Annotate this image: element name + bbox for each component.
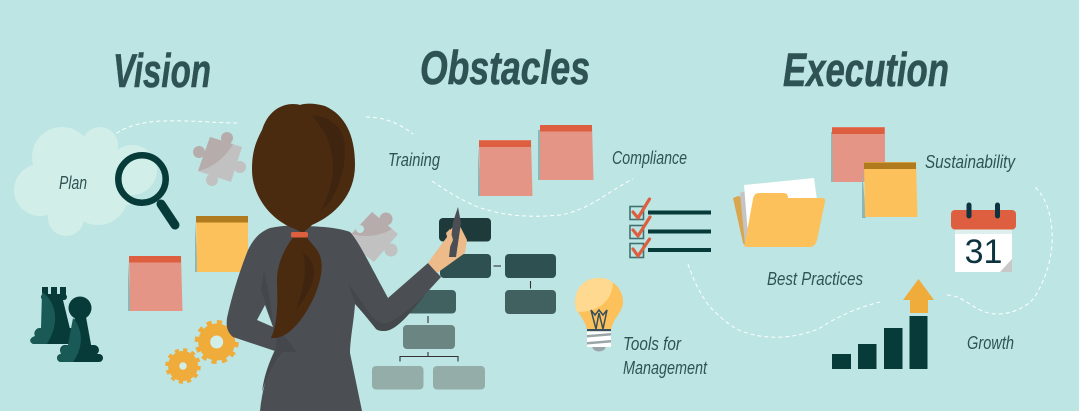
dashed path: Plan to Training (93, 121, 238, 158)
icon: gears (167, 322, 237, 382)
chess pawn (57, 296, 103, 362)
org chart (372, 218, 556, 390)
hair shadow (312, 115, 345, 212)
arm gap (257, 305, 273, 327)
label: Plan: Plan (59, 172, 87, 193)
label: Tools for Management: Management (623, 357, 708, 378)
icon: up arrow (903, 279, 934, 313)
large gear (197, 322, 237, 362)
dashed path: Growth to Sustainability (947, 187, 1052, 314)
small gear (167, 350, 199, 382)
sticky note: yellow left (195, 216, 248, 272)
icon: puzzle piece left (193, 132, 246, 186)
label: Sustainability: Sustainability (925, 151, 1016, 172)
fingers (446, 229, 453, 247)
pen (449, 207, 461, 257)
sticky note: yellow execution (862, 162, 918, 218)
icon: calendar (951, 202, 1016, 272)
icon: growth bar chart (832, 316, 928, 369)
icon: checklist (630, 199, 711, 258)
icon: folder (733, 178, 825, 247)
sticky note: pink middle left (478, 140, 532, 196)
icon: chess pieces (30, 287, 103, 362)
heading: Execution: Execution (783, 43, 949, 96)
woman figure (227, 104, 467, 411)
hair band (291, 232, 308, 238)
cloud: Plan (14, 127, 157, 236)
sticky note: pink middle right (538, 125, 594, 180)
label: Growth: Growth (967, 332, 1014, 353)
label: Tools for Management: Tools for (623, 333, 682, 354)
jacket (227, 226, 441, 411)
label: Training: Training (388, 149, 441, 170)
sticky note: pink left (128, 256, 182, 311)
icon: magnifying glass (118, 155, 175, 225)
dashed path: Checklist to Growth (688, 264, 880, 337)
chess rook (30, 287, 76, 344)
head hair (252, 104, 355, 233)
icon: puzzle piece right (345, 212, 398, 262)
ponytail shadow (296, 253, 314, 310)
label: Tools for Management (623, 333, 708, 378)
calendar date: 31 (965, 233, 1002, 271)
label: Best Practices: Best Practices (767, 268, 863, 289)
label: Compliance: Compliance (612, 147, 687, 168)
ponytail (271, 237, 322, 338)
jacket shadows (261, 270, 425, 392)
hand (428, 222, 467, 273)
icon: light bulb (575, 278, 623, 352)
dashed path: Training to Compliance (432, 179, 633, 216)
sticky note: pink execution (831, 127, 885, 182)
dashed path: Training upper (366, 117, 413, 134)
heading: Vision: Vision (113, 44, 211, 97)
heading: Obstacles: Obstacles (420, 41, 590, 94)
